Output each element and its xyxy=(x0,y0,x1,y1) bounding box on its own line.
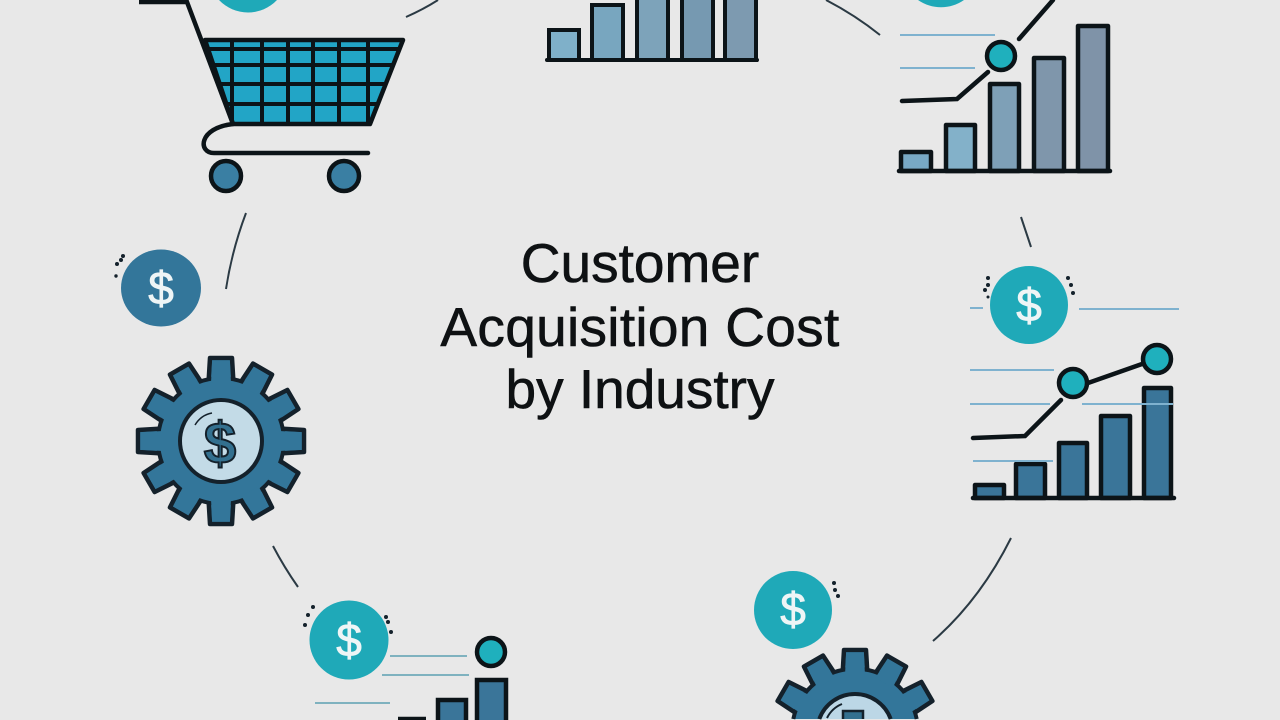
title xyxy=(440,232,840,420)
icon: dollar coin left xyxy=(114,250,201,326)
icon: gear with dollar: $ xyxy=(204,411,236,476)
chart: bottom left with dollar coin: $ xyxy=(336,614,362,666)
title: Customer xyxy=(521,232,759,294)
chart: bottom left with dollar coin xyxy=(303,600,506,720)
ring connector arcs xyxy=(226,0,1031,641)
title: by Industry xyxy=(505,358,775,420)
icon: dollar coin right xyxy=(983,266,1075,344)
icon: dollar coin left: $ xyxy=(148,262,174,314)
icon: shopping cart xyxy=(139,0,403,191)
bar chart: top centre xyxy=(547,0,757,60)
icon: gear with dollar xyxy=(138,358,304,524)
title: Acquisition Cost xyxy=(440,296,840,358)
icon: dollar coin with gear, bottom right xyxy=(754,571,933,719)
icon: dollar coin right: $ xyxy=(1016,279,1042,331)
chart: right with dollar coin xyxy=(970,266,1179,498)
icon: dollar coin with gear, bottom right: $ xyxy=(780,583,806,635)
chart: top right xyxy=(899,0,1110,171)
